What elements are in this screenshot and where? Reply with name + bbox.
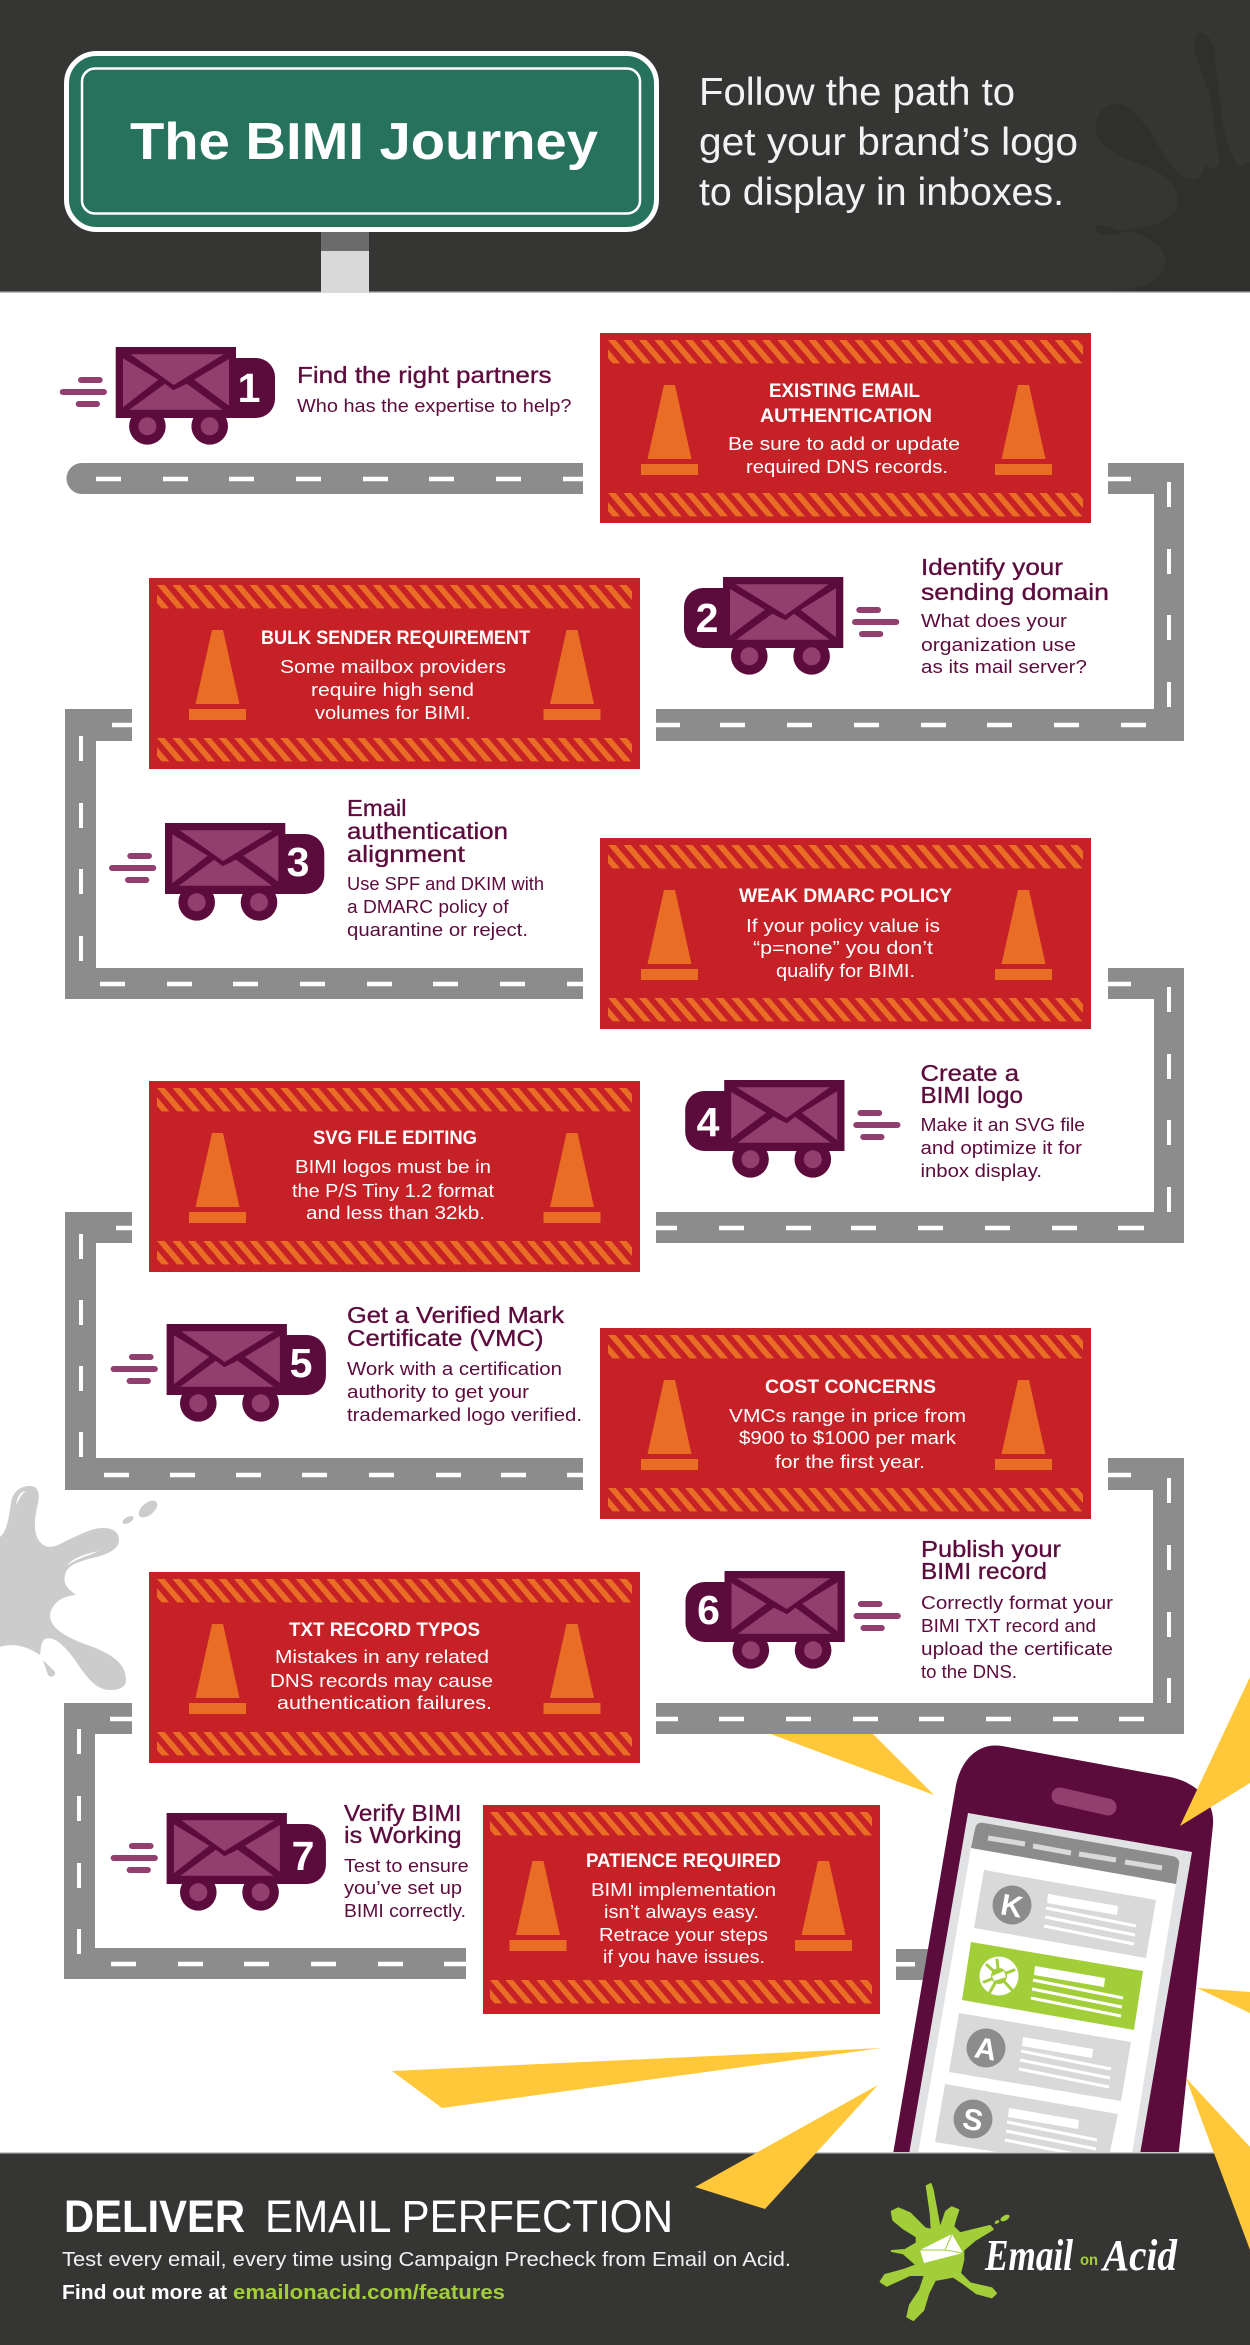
inbox row A: A xyxy=(972,2031,999,2068)
step 1 text: Find the right partners xyxy=(297,362,552,388)
panel: cost concerns: for the first year. xyxy=(775,1451,925,1472)
step 5 truck: 5 xyxy=(290,1340,312,1386)
step 3 text: a DMARC policy of xyxy=(347,896,509,917)
panel: weak dmarc policy xyxy=(600,838,1091,1029)
panel: patience required: BIMI implementation xyxy=(591,1879,776,1900)
step 4 text: inbox display. xyxy=(920,1160,1042,1181)
yellow rays around phone xyxy=(392,1677,1250,2250)
step 4 truck: 4 xyxy=(697,1099,720,1145)
panel: svg file editing xyxy=(149,1081,640,1272)
panel: weak dmarc policy: WEAK DMARC POLICY xyxy=(739,886,952,907)
grey paint splat xyxy=(0,1486,160,1690)
step 2 text xyxy=(921,554,1109,677)
step 2 text: Identify your xyxy=(921,554,1063,580)
road: segment 3 xyxy=(65,709,583,999)
footer link: Find out more at xyxy=(62,2282,227,2304)
logo: email on acid xyxy=(881,2184,1178,2320)
road: segment 5 xyxy=(65,1212,583,1490)
subtitle: Follow the path to xyxy=(699,71,1015,114)
step 7 text: Test to ensure xyxy=(344,1855,469,1876)
footer xyxy=(0,2152,1250,2345)
panel: svg file editing: the P/S Tiny 1.2 format xyxy=(292,1180,494,1201)
panel: weak dmarc policy: qualify for BIMI. xyxy=(776,960,915,981)
panel: txt record typos xyxy=(149,1572,640,1763)
logo: email on acid: on xyxy=(1080,2252,1098,2269)
step 2 truck: 2 xyxy=(696,595,718,641)
road: final stub into phone xyxy=(896,1949,940,1980)
step 1 text xyxy=(297,362,572,416)
step 7 text: you’ve set up xyxy=(344,1877,462,1898)
panel: cost concerns xyxy=(600,1328,1091,1519)
step 4 text: and optimize it for xyxy=(920,1137,1082,1158)
panel: patience required: Retrace your steps xyxy=(599,1924,768,1945)
step 3 text xyxy=(347,795,544,940)
step 3 text: authentication xyxy=(347,818,508,844)
step 5 text: Work with a certification xyxy=(347,1358,562,1379)
step 2 text: What does your xyxy=(921,610,1067,631)
step 5 text xyxy=(347,1302,582,1425)
panel: txt record typos: DNS records may cause xyxy=(270,1670,493,1691)
phone body xyxy=(892,1745,1213,2160)
panel: txt record typos: TXT RECORD TYPOS xyxy=(289,1620,480,1641)
panel: cost concerns: $900 to $1000 per mark xyxy=(739,1427,957,1448)
footer heading: DELIVER xyxy=(64,2191,245,2242)
step 6 text: BIMI record xyxy=(921,1558,1047,1584)
panel: patience required: if you have issues. xyxy=(603,1946,765,1967)
road: segment 7 xyxy=(64,1703,466,1979)
step 7 text: BIMI correctly. xyxy=(344,1900,466,1921)
step 5 text: Get a Verified Mark xyxy=(347,1302,565,1328)
inbox row brand logo xyxy=(962,1942,1143,2030)
step 6 text: BIMI TXT record and xyxy=(921,1615,1096,1636)
step 7 truck: 7 xyxy=(292,1833,314,1879)
panel: txt record typos: authentication failures. xyxy=(277,1692,492,1713)
inbox row S: S xyxy=(960,2102,985,2138)
panel: bulk sender requirement: BULK SENDER REQUIREMENT xyxy=(261,628,530,649)
panel: existing email authentication: AUTHENTICATION xyxy=(760,406,932,427)
road: segment 1 xyxy=(66,463,583,494)
step 3 truck xyxy=(112,823,324,921)
panel: existing email authentication: required DNS records. xyxy=(746,456,948,477)
footer link: emailonacid.com/features xyxy=(233,2282,505,2304)
step 1 text: Who has the expertise to help? xyxy=(297,395,572,416)
sign post xyxy=(321,232,369,293)
phone address bar xyxy=(971,1823,1179,1884)
step 6 truck xyxy=(686,1571,898,1669)
panel: svg file editing: SVG FILE EDITING xyxy=(313,1128,477,1149)
step 5 text: Certificate (VMC) xyxy=(347,1325,544,1351)
inbox row A xyxy=(949,2013,1131,2101)
inbox row K: K xyxy=(998,1888,1026,1925)
step 6 text: upload the certificate xyxy=(921,1638,1113,1659)
step 2 text: sending domain xyxy=(921,579,1109,605)
step 3 text: alignment xyxy=(347,841,466,867)
step 6 text: Correctly format your xyxy=(921,1592,1113,1613)
panel: existing email authentication: EXISTING EMAIL xyxy=(769,381,920,402)
footer link xyxy=(62,2282,505,2304)
step 7 text xyxy=(344,1800,469,1921)
road: segment 6 xyxy=(656,1458,1184,1734)
panel: svg file editing: and less than 32kb. xyxy=(306,1202,485,1223)
step 3 text: Use SPF and DKIM with xyxy=(347,873,544,894)
panel: patience required: isn’t always easy. xyxy=(604,1901,759,1922)
step 4 text: Create a xyxy=(920,1060,1019,1086)
panel: patience required: PATIENCE REQUIRED xyxy=(586,1851,781,1872)
step 7 truck xyxy=(114,1813,326,1911)
inbox row K xyxy=(974,1870,1156,1958)
step 7 text: Verify BIMI xyxy=(344,1800,462,1826)
step 4 text: BIMI logo xyxy=(920,1082,1023,1108)
step 7 text: is Working xyxy=(344,1822,462,1848)
logo: email on acid: Acid xyxy=(1100,2231,1178,2280)
step 5 truck xyxy=(114,1324,326,1422)
panel: weak dmarc policy: “p=none” you don’t xyxy=(753,937,933,958)
step 3 truck: 3 xyxy=(287,839,309,885)
step 3 text: Email xyxy=(347,795,406,821)
panel: existing email authentication: Be sure to add or update xyxy=(728,433,960,454)
yellow ray behind road xyxy=(768,1733,934,1795)
footer heading xyxy=(64,2191,673,2242)
step 5 text: authority to get your xyxy=(347,1381,529,1402)
step 1 truck: 1 xyxy=(238,365,260,411)
panel: bulk sender requirement: require high send xyxy=(311,679,474,700)
step 2 truck xyxy=(684,577,896,675)
road: segment 4 xyxy=(656,968,1184,1243)
inbox row S xyxy=(935,2084,1118,2170)
step 6 text xyxy=(921,1536,1113,1682)
step 6 text: to the DNS. xyxy=(921,1661,1017,1682)
footer heading: EMAIL PERFECTION xyxy=(265,2191,673,2242)
phone screen xyxy=(908,1813,1192,2160)
step 2 text: organization use xyxy=(921,634,1076,655)
panel: bulk sender requirement xyxy=(149,578,640,769)
panel: bulk sender requirement: Some mailbox providers xyxy=(280,656,506,677)
step 6 text: Publish your xyxy=(921,1536,1061,1562)
subtitle: get your brand’s logo xyxy=(699,121,1078,164)
panel: bulk sender requirement: volumes for BIMI. xyxy=(315,702,471,723)
phone xyxy=(892,1745,1213,2170)
subtitle: to display in inboxes. xyxy=(699,171,1064,214)
panel: txt record typos: Mistakes in any related xyxy=(275,1646,489,1667)
panel: cost concerns: VMCs range in price from xyxy=(729,1405,966,1426)
step 4 text: Make it an SVG file xyxy=(920,1114,1085,1135)
panel: svg file editing: BIMI logos must be in xyxy=(295,1156,491,1177)
title road sign xyxy=(66,54,656,230)
subtitle xyxy=(699,71,1078,214)
step 2 text: as its mail server? xyxy=(921,656,1087,677)
footer description: Test every email, every time using Campaign Precheck from Email on Acid. xyxy=(62,2249,791,2271)
phone speaker xyxy=(1060,1796,1108,1807)
title road sign: The BIMI Journey xyxy=(130,113,598,171)
step 4 truck xyxy=(685,1080,898,1178)
step 1 truck xyxy=(63,347,275,445)
step 6 truck: 6 xyxy=(697,1587,720,1633)
panel: cost concerns: COST CONCERNS xyxy=(765,1377,936,1398)
step 5 text: trademarked logo verified. xyxy=(347,1404,582,1425)
panel: existing email authentication xyxy=(600,333,1091,523)
panel: weak dmarc policy: If your policy value is xyxy=(746,915,940,936)
logo: email on acid: Email xyxy=(984,2231,1074,2280)
step 4 text xyxy=(920,1060,1085,1181)
header band xyxy=(0,0,1250,292)
step 3 text: quarantine or reject. xyxy=(347,919,528,940)
panel: patience required xyxy=(483,1805,880,2014)
road: segment 2 xyxy=(656,463,1184,741)
